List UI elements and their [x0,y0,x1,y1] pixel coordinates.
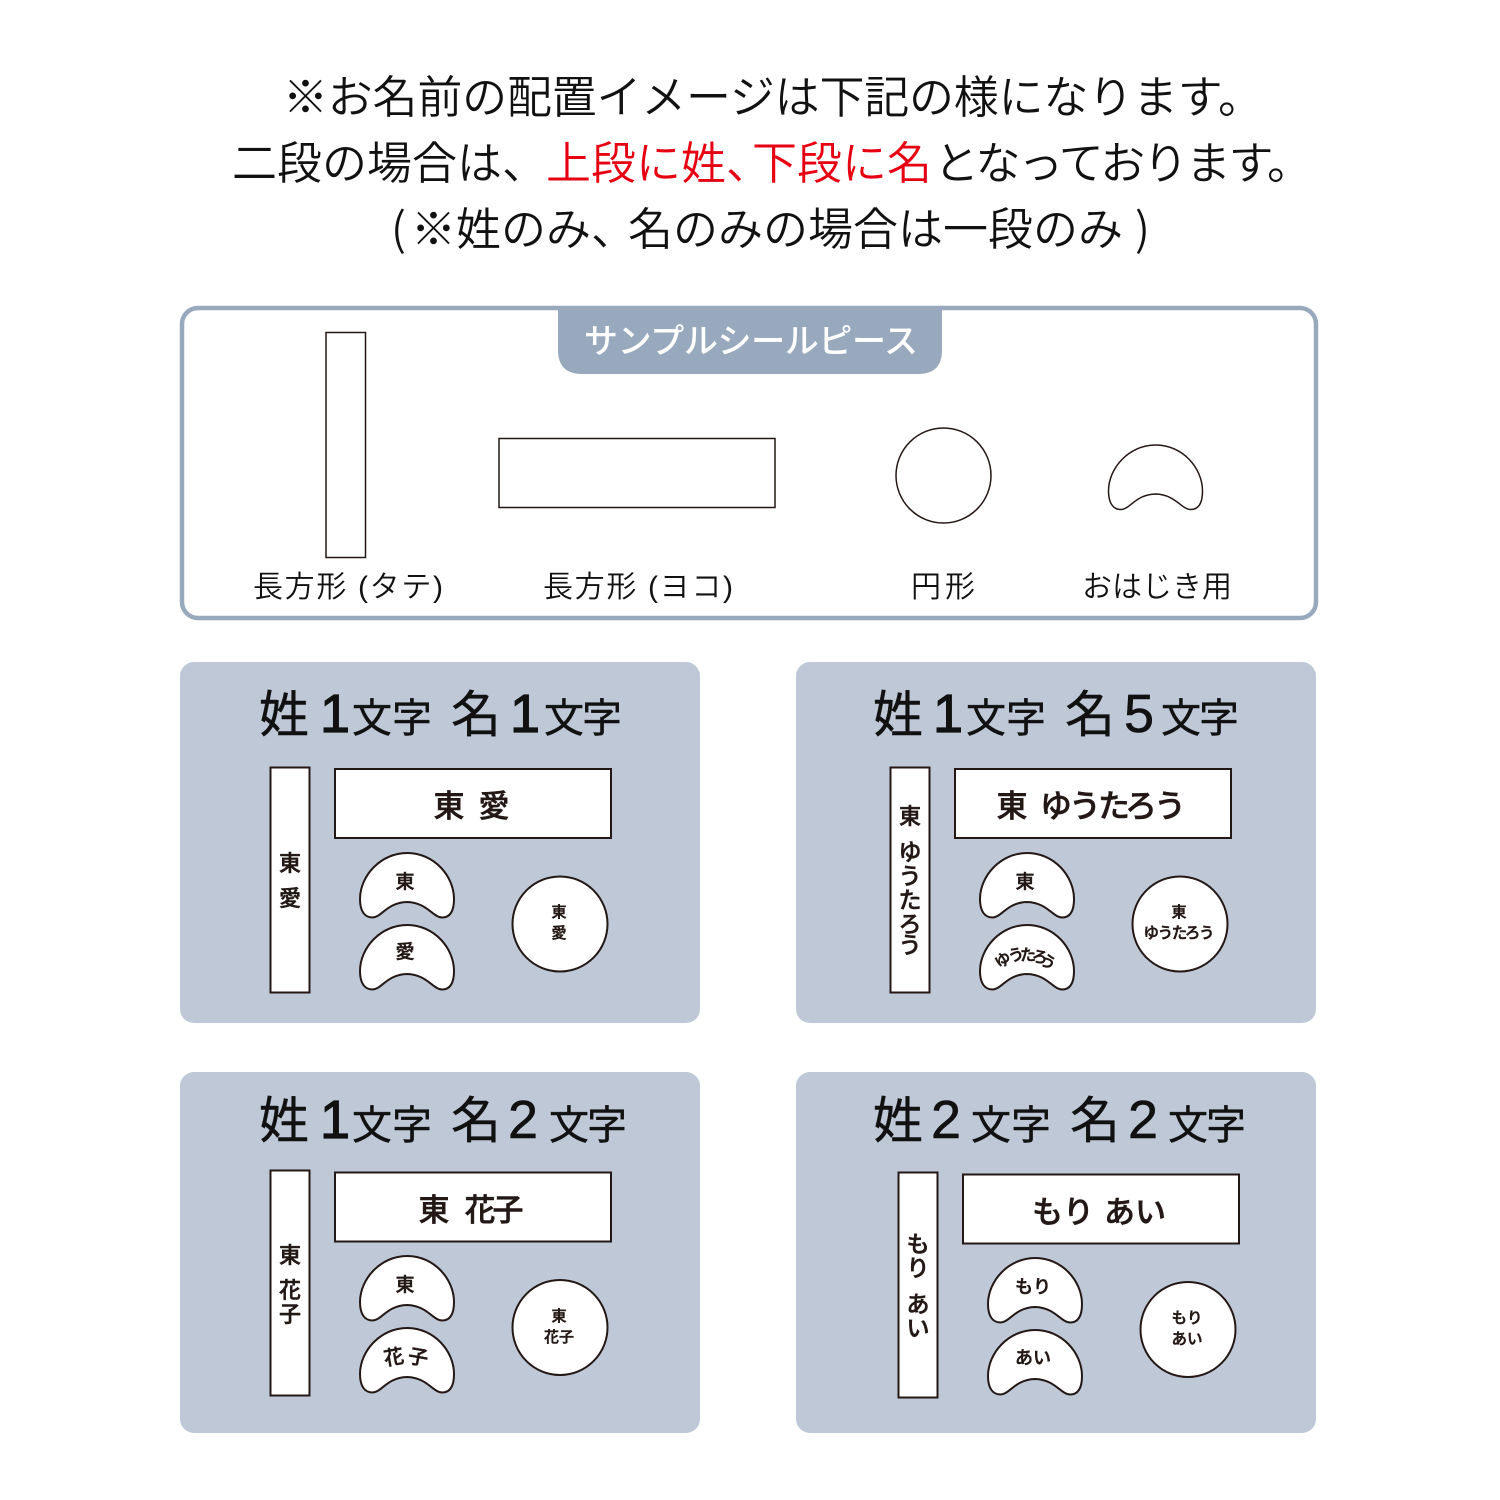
panel heading: 文字 [1168,1104,1246,1148]
marble seals: 子 [406,1346,430,1371]
vertical seal: い [906,1315,930,1341]
vertical seal [898,1172,938,1398]
tab: sample seal piece title: サンプルシールピース [584,323,918,361]
vertical seal: た [898,887,922,913]
marble seals: 愛 [395,941,415,963]
vertical seal: 東 [899,804,921,829]
horizontal seal: 子 [492,1193,524,1228]
panel heading: 2 [1128,1090,1158,1150]
horizontal seal [335,1172,611,1242]
heading: placement note: ※姓のみ、 [411,193,636,258]
sample: horizontal rectangle: 長方形 (ヨコ) [543,571,733,604]
marble seals: ゆ [992,948,1015,972]
heading: placement note: ( [391,193,406,258]
sample: horizontal rectangle [499,438,775,604]
panel: surname 1 given name 1 [180,662,700,1023]
vertical seal: 子 [279,1302,301,1327]
panel heading: 姓 [259,687,309,743]
sample: marble bean shape [1082,445,1232,604]
circle seal: 東 [1171,904,1187,921]
panel heading: 文字 [971,1104,1051,1148]
vertical seal: 東 [279,1243,301,1268]
vertical seal: う [898,932,922,958]
panel heading: 文字 [966,697,1046,741]
panel heading: 文字 [352,1104,432,1148]
panel: sample seal pieces [182,308,1316,618]
panel heading: 2 [931,1090,961,1150]
horizontal seal: あい [1104,1195,1166,1230]
marble seals: た [1020,946,1036,964]
panel heading: 1 [320,1090,350,1150]
panel heading [873,1090,1246,1150]
horizontal seal [955,769,1231,838]
heading: placement note: 名のみの場合は一段のみ [628,193,1123,258]
panel heading: 2 [508,1090,538,1150]
sample: vertical rectangle: 長方形 (タテ) [253,571,443,604]
heading: placement note: 二段の場合は、 [232,127,547,192]
marble seals [988,1258,1082,1394]
marble seals: 花 [382,1345,406,1371]
panel heading: 姓 [873,687,923,743]
marble seals [360,853,454,990]
circle seal [512,1280,608,1375]
marble seals: 東 [395,1274,415,1296]
vertical seal: ゆ [898,839,922,865]
circle seal: ゆうたろう [1144,924,1214,942]
marble seals [980,853,1074,990]
panel: surname 1 given name 5 [796,662,1316,1023]
vertical seal: り [906,1255,930,1281]
heading: placement note: となっております。 [934,127,1312,192]
sample: circle [896,428,991,604]
heading: placement note: ) [1135,193,1150,258]
panel heading: 1 [320,684,350,744]
marble seals: う [1006,946,1026,966]
panel heading: 姓 [873,1093,923,1149]
vertical seal [270,1170,310,1396]
panel heading: 名 [1065,687,1115,743]
panel heading: 文字 [544,697,622,741]
vertical seal: う [898,863,922,889]
circle seal: もり [1171,1309,1203,1327]
panel heading [259,1090,627,1150]
horizontal seal: 東 [434,789,464,824]
panel heading: 1 [933,684,963,744]
circle seal [1140,1282,1236,1377]
panel heading [873,684,1239,744]
marble seals: あい [1015,1348,1051,1368]
panel heading [259,684,622,744]
vertical seal [270,768,310,992]
heading: placement note: 下段に名 [752,127,932,192]
marble seals: う [1036,952,1059,974]
panel heading: 1 [510,684,540,744]
horizontal seal: 東 [418,1193,450,1228]
sample: vertical rectangle [253,332,443,604]
vertical seal: ろ [898,911,922,937]
horizontal seal: もり [1032,1195,1094,1230]
marble seals: 東 [395,871,415,893]
panel heading: 文字 [1161,697,1239,741]
heading: placement note [232,61,1312,258]
sample: marble bean shape: おはじき用 [1082,571,1232,604]
panel heading: 文字 [352,697,432,741]
vertical seal: 愛 [279,886,301,911]
vertical seal: 花 [279,1278,301,1303]
circle seal [512,876,608,972]
heading: placement note: ※お名前の配置イメージは下記の様になります。 [283,61,1263,126]
circle seal: 愛 [551,925,567,942]
panel heading: 名 [451,1093,501,1149]
circle seal: 花子 [544,1329,574,1346]
heading: placement note: 上段に姓、 [546,127,771,192]
horizontal seal: ゆうたろう [1040,788,1186,824]
horizontal seal: 花 [464,1193,496,1228]
horizontal seal: 愛 [478,789,510,824]
vertical seal: あ [906,1291,930,1317]
panel heading: 姓 [259,1093,309,1149]
sample: circle: 円形 [911,571,975,604]
vertical seal [890,768,930,992]
marble seals: ろ [1030,948,1049,968]
marble seals [360,1256,454,1392]
panel heading: 文字 [549,1104,627,1148]
horizontal seal [335,769,611,838]
panel heading: 名 [451,687,501,743]
panel: surname 2 given name 2 [796,1072,1316,1433]
horizontal seal: 東 [996,789,1028,824]
vertical seal: も [906,1231,930,1257]
circle seal: 東 [551,1308,567,1325]
vertical seal: 東 [279,851,301,876]
horizontal seal [963,1174,1239,1244]
circle seal [1132,876,1228,972]
panel heading: 5 [1124,684,1154,744]
panel heading: 名 [1070,1093,1120,1149]
circle seal: あい [1171,1330,1203,1348]
circle seal: 東 [551,904,567,921]
marble seals: 東 [1015,871,1035,893]
panel: surname 1 given name 2 [180,1072,700,1433]
tab: sample seal piece title [558,310,942,374]
marble seals: もり [1015,1277,1051,1297]
